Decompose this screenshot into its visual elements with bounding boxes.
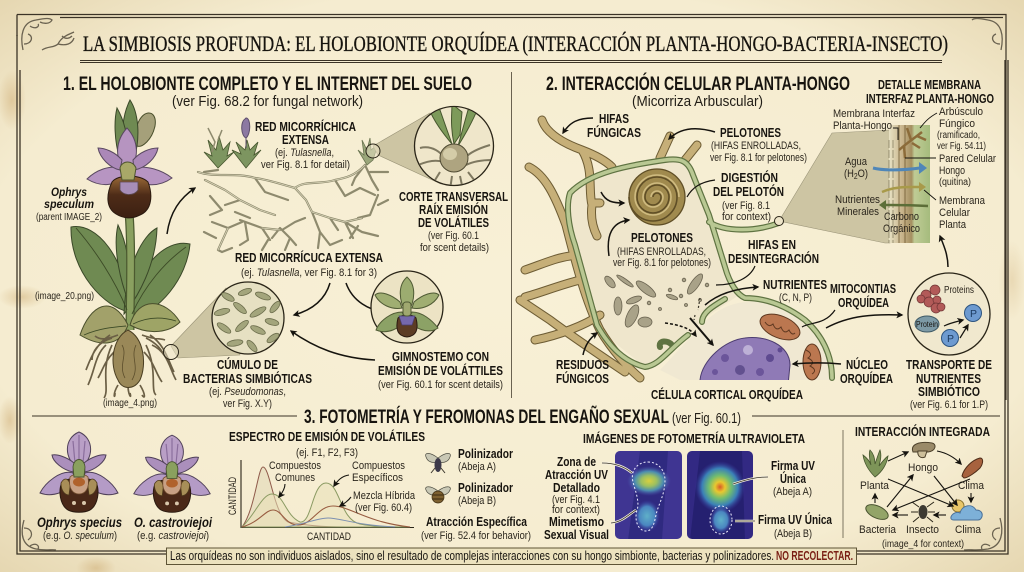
label: bacterias: (ej. Pseudomonas, <box>209 386 286 398</box>
arrow: to transport <box>826 315 902 328</box>
callout: nutrient transport: P <box>947 334 954 345</box>
icon: mushroom <box>912 442 935 458</box>
arrow: transport to detail <box>940 236 948 267</box>
label: red micorríchica: RED MICORRÍCHICA <box>255 119 356 134</box>
label: residuos <box>556 333 609 386</box>
label: arbúsculo: Fúngico <box>939 118 975 130</box>
label: red micorrícuca <box>235 250 383 279</box>
chart: volatile emission spectrum: CANTIDAD <box>307 531 351 543</box>
subheading: section 1: (ver Fig. 68.2 for fungal network) <box>172 94 363 110</box>
label: agua: O) <box>858 168 868 180</box>
label: red micorríchica: EXTENSA <box>282 132 329 147</box>
illustration: O. castroviejoi <box>134 435 210 512</box>
diagram: integrated interaction: Clima <box>958 480 985 492</box>
icon: rod bacterium <box>864 501 890 523</box>
heading: section 3: 3. FOTOMETRÍA Y FEROMONAS DEL ENGAÑO SEXUAL <box>304 406 669 428</box>
label: pared celular: (quitina) <box>939 177 971 188</box>
label: mitocondrias: ORQUÍDEA <box>838 295 889 310</box>
panel: 2 interacción celular <box>520 73 996 411</box>
label: species names: (e.g. castroviejoi) <box>137 530 209 542</box>
label: membrana celular: Planta <box>939 219 967 231</box>
diagram: integrated interaction: Insecto <box>906 524 939 536</box>
label: species names: (e.g. O. speculum) <box>43 530 117 542</box>
label: carbono orgánico: Orgánico <box>883 223 920 235</box>
label: hifas en desintegración: DESINTEGRACIÓN <box>728 251 819 266</box>
label: pelotones top: ver Fig. 8.1 for pelotones) <box>710 152 807 164</box>
label: pared celular: Pared Celular <box>939 153 996 165</box>
label: bacterias: CÚMULO DE <box>217 357 278 372</box>
label: zona de atracción: Detallado <box>553 480 600 495</box>
label: pelotones centre: ver Fig. 8.1 for pelotones) <box>613 257 711 269</box>
illustration: orchid plant <box>71 100 190 398</box>
label: nutrientes <box>705 277 827 305</box>
arrow: hypha to peloton <box>601 192 624 203</box>
image: UV photometry B <box>687 451 753 540</box>
label: red micorríchica: ver Fig. 8.1 for detail) <box>261 159 350 171</box>
icon: weather cloud <box>951 500 982 520</box>
icon: soil bacterium <box>962 458 983 478</box>
label: arbúsculo: ver Fig. 54.11) <box>937 141 986 152</box>
diagram: integrated interaction: Planta <box>860 480 890 492</box>
label: nutrientes: NUTRIENTES <box>763 277 827 292</box>
icon: bee B <box>426 487 450 503</box>
chart: volatile emission spectrum: Compuestos <box>352 460 405 472</box>
label: nutrientes: (C, N, P) <box>779 292 812 304</box>
label: pelotones top <box>669 125 807 164</box>
heading: UV images: IMÁGENES DE FOTOMETRÍA ULTRAVIOLETA <box>583 431 805 446</box>
panel: 1 holobionte <box>35 74 508 410</box>
label: gimnostemo: GIMNOSTEMO CON <box>392 349 489 364</box>
label: núcleo: ORQUÍDEA <box>840 371 893 386</box>
label: agua: (H <box>844 168 856 180</box>
chart: volatile emission spectrum: ESPECTRO DE EMISIÓN DE VOLÁTILES <box>229 429 425 444</box>
callout: orchid species label: Ophrys <box>51 185 87 199</box>
label: arbúsculo: (ramificado, <box>937 130 980 141</box>
label: bacterias: BACTERIAS SIMBIÓTICAS <box>183 371 312 386</box>
label: pared celular <box>905 153 996 188</box>
label: hifas en desintegración: HIFAS EN <box>748 237 796 252</box>
label: pared celular: Hongo <box>939 165 965 177</box>
label: image_4: (image_4.png) <box>103 398 157 409</box>
label: pelotones centre: PELOTONES <box>631 230 693 245</box>
label: red micorríchica: (ej. Tulasnella, <box>275 147 334 159</box>
label: mimetismo: Mimetismo <box>549 514 604 529</box>
callout: nutrient transport: Protein <box>916 319 938 329</box>
flower <box>87 167 123 185</box>
arrow: to bacteria <box>294 283 330 315</box>
label: firma UV B <box>735 512 833 540</box>
label: membrana interfaz: Planta-Hongo <box>833 120 892 132</box>
heading: section 2: 2. INTERACCIÓN CELULAR PLANTA-HONGO <box>546 73 850 95</box>
label: digestión: DIGESTIÓN <box>721 170 778 185</box>
label: corte transversal: DE VOLÁTILES <box>418 215 489 230</box>
label: red micorríchica <box>255 119 356 171</box>
label: arbúsculo: Arbúsculo <box>939 106 983 118</box>
illustration: cortical cell <box>520 120 833 385</box>
label: pelotones top: PELOTONES <box>720 125 781 140</box>
roots <box>86 335 176 398</box>
callout: nutrient transport <box>908 273 990 355</box>
corner ornament: bottom right <box>964 518 1002 550</box>
corner ornament: top right <box>972 18 1002 50</box>
callout: nutrient transport: Proteins <box>944 285 974 296</box>
fungal residues <box>603 272 709 329</box>
label: corte transversal: CORTE TRANSVERSAL <box>399 189 508 204</box>
label: corte transversal: RAÍX EMISIÓN <box>419 202 488 217</box>
label: zona de atracción <box>545 454 632 516</box>
label: corte transversal <box>399 189 508 254</box>
callout: orchid species label: (parent IMAGE_2) <box>36 212 102 223</box>
corner ornament: bottom left <box>22 520 56 550</box>
label: agua: 2 <box>854 172 858 181</box>
label: digestión: for context) <box>722 211 771 223</box>
icons and labels: pollinators: Polinizador <box>458 481 513 495</box>
callout: bacteria cluster zoom <box>164 282 284 360</box>
callout: nutrient transport: P <box>970 309 977 320</box>
label: digestión: (ver Fig. 8.1 <box>722 200 770 212</box>
chart: volatile emission spectrum: (ej. F1, F2, F3) <box>296 447 358 459</box>
cell wall <box>568 159 832 378</box>
label: species names: Ophrys specius <box>37 514 122 530</box>
icons and labels: pollinators: (ver Fig. 52.4 for behavior) <box>421 530 531 542</box>
label: digestión: DEL PELOTÓN <box>713 184 784 199</box>
label: carbono orgánico <box>883 211 920 235</box>
label: firma UV B: (Abeja B) <box>774 528 812 540</box>
diagram: integrated interaction: INTERACCIÓN INTEGRADA <box>855 424 990 439</box>
arrow: to gymnostemium <box>346 283 393 313</box>
label: zona de atracción: Atracción UV <box>545 467 608 482</box>
label: arbúsculo <box>920 106 986 152</box>
arrows: cycle <box>875 451 971 515</box>
label: species names <box>37 514 213 542</box>
chart: mycorrhizal network <box>198 118 388 252</box>
chart: volatile emission spectrum: Comunes <box>275 472 315 484</box>
label: núcleo <box>793 357 893 386</box>
label: membrana celular: Celular <box>939 207 970 219</box>
label: núcleo: NÚCLEO <box>846 357 888 372</box>
label: detalle membrana <box>866 78 994 106</box>
label: residuos: RESIDUOS <box>556 357 609 372</box>
image: UV photometry A <box>615 451 682 540</box>
label: membrana celular <box>924 190 986 231</box>
label: transporte: SIMBIÓTICO <box>918 384 980 399</box>
label: mitocondrias: MITOCONTIAS <box>830 281 896 296</box>
label: nutrientes minerales: Nutrientes <box>835 194 880 206</box>
label: bacterias <box>183 357 312 410</box>
arrow: dashed digestion <box>665 323 696 336</box>
panel: 3 fotometría <box>32 406 1000 550</box>
icon: plant <box>863 450 888 477</box>
label: mimetismo: Sexual Visual <box>544 527 609 542</box>
label: agua: Agua <box>845 156 868 168</box>
label: firma UV A: (Abeja A) <box>773 486 812 498</box>
label: corte transversal: for scent details) <box>420 242 489 254</box>
chart: volatile emission spectrum: CANTIDAD <box>227 477 239 515</box>
footer banner: Las orquídeas no son individuos aislados, sino el resultado de complejas interacciones con su hongo simbionte, bacterias y polinizadores. <box>170 549 774 563</box>
diagram: integrated interaction: Clima <box>955 524 982 536</box>
label: firma UV A: Firma UV <box>771 458 815 473</box>
chart: volatile emission spectrum: (ver Fig. 60.4) <box>355 502 412 514</box>
chart: volatile emission spectrum: Específicos <box>352 472 403 484</box>
label: transporte <box>906 357 992 411</box>
label: membrana celular: Membrana <box>939 195 986 207</box>
fungal hyphae <box>520 120 697 378</box>
small plants <box>204 136 261 168</box>
illustration: Ophrys specius <box>40 432 118 512</box>
label: pelotones top: (HIFAS ENROLLADAS, <box>711 140 801 152</box>
arrow: gymnostemium to bacteria <box>291 331 375 360</box>
callout: gymnostemium <box>371 271 443 343</box>
arrow: plant to network <box>167 188 195 234</box>
diagram: integrated interaction: (image_4 for context) <box>882 539 964 550</box>
label: firma UV B: Firma UV Única <box>758 512 833 527</box>
nucleus <box>700 337 790 385</box>
cell interior <box>568 159 742 367</box>
label: zona de atracción: Zona de <box>557 454 596 469</box>
label: pelotones centre: (HIFAS ENROLLADAS, <box>617 246 706 258</box>
icons and labels: pollinators: (Abeja B) <box>458 495 496 507</box>
callout: root cross-section zoom <box>366 104 494 190</box>
heading: section 1: 1. EL HOLOBIONTE COMPLETO Y EL INTERNET DEL SUELO <box>63 74 472 95</box>
chart: volatile emission spectrum: Compuestos <box>269 460 321 472</box>
chart: volatile emission spectrum <box>227 429 425 543</box>
label: agua <box>844 156 868 181</box>
label: célula cortical: CÉLULA CORTICAL ORQUÍDEA <box>651 387 803 402</box>
label: transporte: NUTRIENTES <box>916 371 981 386</box>
icons and labels: pollinators: Atracción Específica <box>426 515 528 529</box>
subheading: section 3: (ver Fig. 60.1) <box>672 411 741 427</box>
label: firma UV A: Única <box>780 471 807 486</box>
arrow: pelotones to spiral <box>608 220 629 256</box>
label: gimnostemo: EMISIÓN DE VOLÁTTILES <box>378 363 503 378</box>
icons and labels: pollinators: (Abeja A) <box>458 461 496 473</box>
label: carbono orgánico: Carbono <box>884 211 919 223</box>
callout: membrane detail <box>774 125 930 243</box>
label: transporte: TRANSPORTE DE <box>906 357 992 372</box>
label: nutrientes minerales: Minerales <box>837 206 879 218</box>
label: gimnostemo <box>378 349 503 391</box>
arrows: exchange <box>873 168 920 170</box>
callout: orchid species label: speculum <box>44 197 94 211</box>
callout: orchid species label <box>36 185 102 223</box>
label: digestión <box>687 170 784 223</box>
corner ornament: top left <box>22 18 74 50</box>
label: zona de atracción: (ver Fig. 4.1 <box>552 494 600 506</box>
diagram: integrated interaction <box>855 424 990 550</box>
label: detalle membrana: DETALLE MEMBRANA <box>878 78 981 92</box>
label: gimnostemo: (ver Fig. 60.1 for scent details) <box>378 379 503 391</box>
icon: bee A <box>426 453 450 473</box>
diagram: integrated interaction: Bacteria <box>859 524 897 536</box>
label: membrana interfaz: Membrana Interfaz <box>833 108 915 120</box>
icon: insect <box>911 502 935 522</box>
label: hifas fúngicas: HIFAS <box>599 111 629 126</box>
label: mitocondrias <box>802 281 896 327</box>
label: red micorrícuca: (ej. Tulasnella, ver Fig. 8.1 for 3) <box>241 267 377 279</box>
label: species names: O. castroviejoi <box>134 514 213 530</box>
label: corte transversal: (ver Fig. 60.1 <box>428 230 479 242</box>
mitochondria <box>756 309 821 380</box>
icons and labels: pollinators <box>421 447 531 542</box>
label: firma UV A <box>733 458 815 498</box>
footer banner: NO RECOLECTAR. <box>776 549 853 563</box>
label: pelotones centre <box>613 230 711 269</box>
label: hifas fúngicas: FÚNGICAS <box>587 125 641 140</box>
chart: volatile emission spectrum: Mezcla Híbrida <box>353 490 416 502</box>
label: hifas en desintegración <box>716 237 819 285</box>
label: image_20: (image_20.png) <box>35 291 94 302</box>
label: residuos: FÚNGICOS <box>556 371 609 386</box>
label: red micorrícuca: RED MICORRÍCUCA EXTENSA <box>235 250 383 265</box>
label: transporte: (ver Fig. 6.1 for 1.P) <box>910 399 988 411</box>
label: membrana interfaz <box>833 108 915 140</box>
arrow: fragments to nucleus <box>690 318 713 345</box>
icons and labels: pollinators: Polinizador <box>458 447 513 461</box>
label: zona de atracción: for context) <box>552 504 600 516</box>
diagram: integrated interaction: Hongo <box>908 462 938 474</box>
label: bacterias: ver Fig. X.Y) <box>223 398 272 410</box>
subheading: section 2: (Micorriza Arbuscular) <box>632 94 763 110</box>
label: hifas fúngicas <box>563 111 641 140</box>
peloton <box>629 169 685 225</box>
label: mimetismo <box>544 510 636 542</box>
label: nutrientes minerales <box>835 194 880 218</box>
